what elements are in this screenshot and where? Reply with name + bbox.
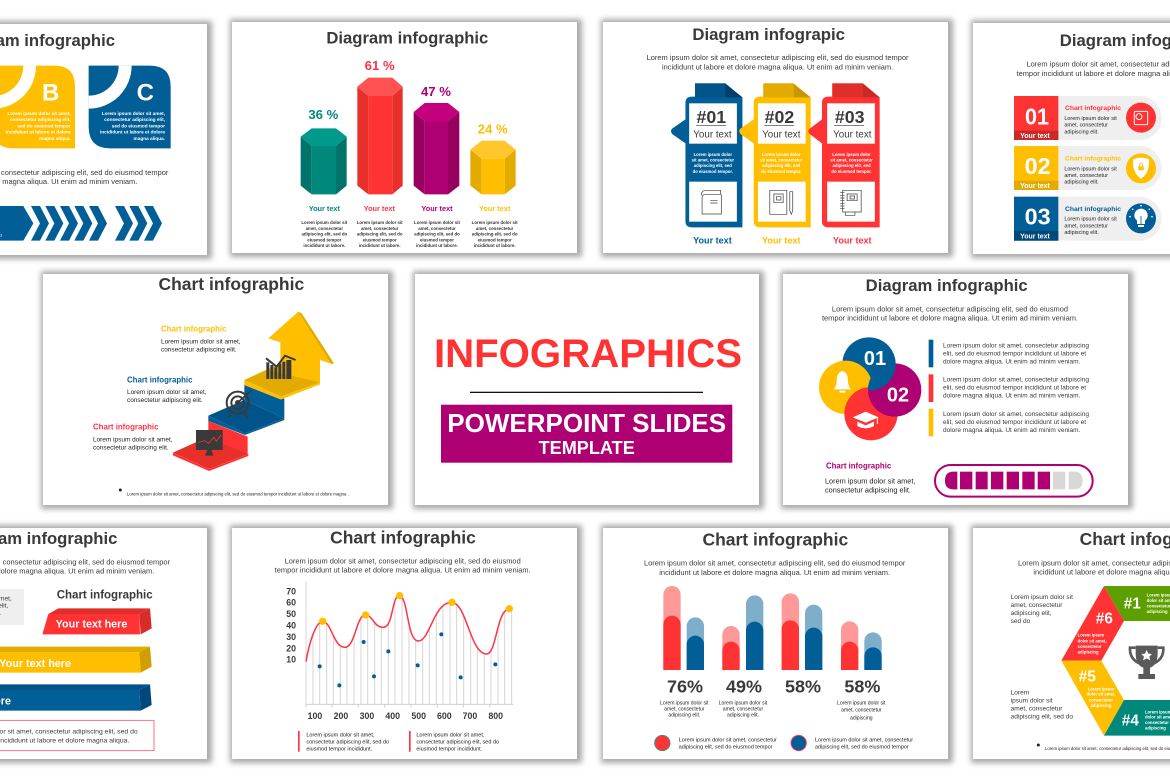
caption: consectetur adipiscing elit. <box>825 486 911 495</box>
prism captions: Your text <box>364 204 395 213</box>
ribbon yellow <box>0 647 152 673</box>
footnote <box>1037 743 1170 751</box>
panel: numbered list slide <box>971 20 1170 258</box>
row 02: Your text <box>1020 183 1051 190</box>
list item 2 <box>929 374 1089 402</box>
tab #02: do eiusmod tempor. <box>761 169 801 174</box>
list item 1: elit, sed do eiusmod tempor incididunt ut labore et <box>943 350 1086 357</box>
prism captions: amet, consectetur <box>361 226 399 231</box>
panel: circles slide <box>781 271 1133 509</box>
callout: blue: Chart infographic <box>127 375 193 384</box>
callout: yellow <box>161 325 241 354</box>
icon: trophy <box>1130 646 1163 679</box>
bar group 49%: 49% <box>726 677 762 697</box>
row 03: amet, consectetur <box>1064 223 1108 229</box>
legend note 1 <box>298 731 389 752</box>
line chart: 60 <box>286 598 296 608</box>
heading: Diagram infographic <box>326 28 488 47</box>
row 01: 01 <box>1025 103 1049 129</box>
segment #5: consectetur <box>1089 698 1113 703</box>
tab #01: adipiscing elit, sed <box>694 163 732 168</box>
list item 2: dolore magna aliqua. Ut enim ad minim veniam. <box>943 393 1081 400</box>
side note bottom: amet, consectetur <box>1011 705 1063 712</box>
row 02 <box>1014 146 1162 190</box>
callout: blue <box>127 375 207 404</box>
prism captions: amet, consectetur <box>476 226 514 231</box>
line chart: 50 <box>286 609 296 619</box>
tab B: magna aliqua. <box>39 136 71 142</box>
tab #03: Your text <box>833 235 872 245</box>
tab C: magna aliqua. <box>134 136 165 142</box>
line chart: 200 <box>334 711 348 721</box>
prism captions: eiusmod tempor <box>420 237 454 242</box>
tab B: B <box>42 79 59 106</box>
panel: 3D ribbons slide <box>0 525 212 763</box>
line chart: 10 <box>286 654 296 664</box>
row 01: amet, consectetur <box>1064 123 1108 129</box>
legend blue <box>791 735 913 751</box>
body text: Lorem ipsum dolor sit amet, consectetur adipiscing elit, sed do eiusmod tempor <box>647 53 909 62</box>
prism captions: eiusmod tempor <box>363 237 397 242</box>
segment #6: #6 <box>1096 611 1113 628</box>
segment #5: #5 <box>1079 669 1096 686</box>
body text: incididunt ut labore et dolore magna aliqua. Ut enim ad minim veniam. <box>659 568 890 577</box>
segment #4: adipiscing <box>1145 726 1166 731</box>
line chart: 100 <box>308 711 322 721</box>
outlined note: incididunt ut labore et dolore magna aliqua. <box>0 738 129 745</box>
prism captions: Your text <box>421 204 453 213</box>
row 02: Lorem ipsum dolor sit <box>1064 166 1117 172</box>
heading: Diagram infograpic <box>692 25 845 44</box>
segment #4: consectetur <box>1145 720 1169 725</box>
line chart: 30 <box>286 632 296 642</box>
row 01: Your text <box>1020 133 1051 140</box>
body text: tempor incididunt ut labore et dolore magna aliqua. Ut enim ad minim veniam. <box>275 566 531 575</box>
tab #02: Your text <box>762 129 801 140</box>
bar group 49% <box>719 595 768 719</box>
body text: Lorem ipsum dolor sit amet, consectetur adipiscing elit, sed do eiusmod tempor <box>644 559 906 568</box>
body text: Lorem ipsum dolor sit amet, consectetur adipiscing elit, sed do eiusmod <box>832 304 1068 313</box>
tab #03: Lorem ipsum dolor <box>832 152 871 157</box>
prism captions: incididunt ut labore. <box>416 243 458 248</box>
legend note 2: Lorem ipsum dolor sit amet, <box>416 733 485 739</box>
caption: Lorem ipsum dolor sit amet, <box>825 477 915 486</box>
callout: red: consectetur adipiscing elit. <box>93 445 169 452</box>
legend red: Lorem ipsum dolor sit amet, consectetur <box>679 738 777 744</box>
panel: hexagon cycle slide <box>971 525 1170 763</box>
caption <box>825 462 915 495</box>
divider rule <box>470 392 703 393</box>
row 01: Lorem ipsum dolor sit <box>1064 116 1117 122</box>
callout: blue: Lorem ipsum dolor sit amet, <box>127 389 207 396</box>
segment #6: adipiscing <box>1078 649 1099 654</box>
tab B: Lorem ipsum dolor sit amet, <box>7 111 71 117</box>
ribbon blue <box>0 684 152 711</box>
segment #5: adipiscing <box>1091 703 1112 708</box>
prism captions: Lorem ipsum dolor sit <box>414 220 461 225</box>
bar group 49%: amet, consectetur <box>723 706 763 712</box>
line chart: 600 <box>437 711 452 721</box>
side note top: Lorem ipsum dolor sit <box>1011 594 1073 601</box>
segment #1: adipiscing <box>1147 609 1168 614</box>
legend note 1: eiusmod tempor incididunt. <box>306 746 373 752</box>
line chart: 70 <box>286 586 296 596</box>
progress bar <box>935 465 1093 497</box>
legend red <box>655 735 777 751</box>
prism captions: incididunt ut labore. <box>303 243 345 248</box>
line chart <box>286 582 513 721</box>
side note bottom: Lorem <box>1011 689 1029 696</box>
prism 47%: 47 % <box>421 84 451 99</box>
list item 1 <box>929 340 1089 367</box>
row 03 <box>1014 197 1162 241</box>
line chart: 20 <box>286 643 296 653</box>
legend note 1: consectetur adipiscing elit, sed do <box>306 739 389 745</box>
legend note 1: Lorem ipsum dolor sit amet, <box>306 733 375 739</box>
callout: yellow: Lorem ipsum dolor sit amet, <box>161 339 241 346</box>
bar group 76%: adipiscing elit. <box>668 713 700 719</box>
segment #1 <box>1104 586 1170 621</box>
panel: cover slide <box>413 271 764 509</box>
grey note box <box>0 589 24 625</box>
stair arrow <box>173 312 334 471</box>
tab C <box>89 66 171 148</box>
tab #01: #01 <box>697 107 726 127</box>
cover title: INFOGRAPHICS <box>434 331 742 376</box>
side note top: amet, consectetur <box>1011 602 1063 609</box>
subheading: Chart infographic <box>57 589 153 601</box>
tab #01: sit amet, consectetur <box>692 157 734 162</box>
legend note 2 <box>409 731 499 752</box>
bar group 58% <box>782 593 822 697</box>
prism 47% <box>414 84 459 194</box>
row 02: 02 <box>1025 153 1051 179</box>
callout: yellow: consectetur adipiscing elit. <box>161 347 237 354</box>
side note top: sed do <box>1011 618 1031 625</box>
icon: monitor <box>196 430 223 456</box>
bar group second 58%: Lorem ipsum dolor sit <box>837 701 886 707</box>
line chart: 40 <box>286 620 296 630</box>
callout: red: Chart infographic <box>93 423 159 432</box>
row 03: Lorem ipsum dolor sit <box>1064 217 1117 223</box>
list item 1: Lorem ipsum dolor sit amet, consectetur adipiscing <box>943 342 1089 349</box>
row 03: adipiscing elit. <box>1064 230 1099 236</box>
side note bottom: adipiscing elit, sed do <box>1011 714 1073 721</box>
bar group second 58%: amet, consectetur <box>841 708 882 714</box>
prism captions: amet, consectetur <box>418 226 456 231</box>
heading: Chart infographic <box>330 527 476 547</box>
bar group second 58%: adipiscing <box>850 715 873 721</box>
prism 61%: 61 % <box>365 58 395 73</box>
heading: Chart infographic <box>702 530 848 550</box>
overlapping circles <box>819 337 921 440</box>
tab #02: adipiscing elit, sed <box>762 163 801 168</box>
prism 36% <box>301 107 347 194</box>
row 01 <box>1014 96 1162 140</box>
ribbon red <box>42 608 152 634</box>
legend blue: adipiscing elit, sed do eiusmod tempor <box>815 744 909 750</box>
prism captions: adipiscing elit, sed do <box>357 232 403 237</box>
prism captions: eiusmod tempor <box>307 237 342 242</box>
heading: Diagram infographic <box>866 276 1028 295</box>
legend blue: Lorem ipsum dolor sit amet, consectetur <box>815 738 913 744</box>
tab C: incididunt ut labore et dolore <box>100 130 165 136</box>
legend note 2: eiusmod tempor incididunt. <box>416 746 483 752</box>
tab #01: Lorem ipsum dolor <box>694 152 732 157</box>
prism captions: adipiscing elit, sed do <box>414 232 460 237</box>
prism captions: Lorem ipsum dolor sit <box>301 220 348 225</box>
prism captions: adipiscing elit, sed do <box>301 232 348 237</box>
bar group second 58% <box>837 621 886 721</box>
tab #01 <box>671 83 742 245</box>
segment #1: #1 <box>1124 595 1141 612</box>
panel: ABC tabs slide <box>0 21 212 259</box>
tab #03: adipiscing elit, sed <box>833 163 871 168</box>
tab C: C <box>137 79 154 106</box>
prism captions: Your text <box>309 204 340 213</box>
line chart: 500 <box>411 711 426 721</box>
tab #03: sit amet, consectetur <box>830 157 873 162</box>
body text: tempor incididunt ut labore et dolore magna aliqua. Ut enim ad minim veniam. <box>822 313 1078 322</box>
callout: yellow: Chart infographic <box>161 325 227 334</box>
prism captions: eiusmod tempor <box>478 237 512 242</box>
segment #5 <box>1061 661 1124 736</box>
tab C: sed do eiusmod tempor <box>112 123 165 129</box>
list item 3: dolore magna aliqua. Ut enim ad minim veniam. <box>943 427 1081 434</box>
prism captions: incididunt ut labore. <box>359 243 401 248</box>
chevron arrows <box>0 206 162 241</box>
row 02: Chart infographic <box>1065 156 1121 163</box>
bar group 76% <box>660 586 709 719</box>
banner <box>441 405 732 463</box>
row 01: Chart infographic <box>1065 105 1121 112</box>
segment #5: Lorem ipsum <box>1088 686 1114 691</box>
heading: Chart infographic <box>158 274 304 294</box>
outlined note <box>0 720 154 751</box>
tab B: sed do eiusmod tempor <box>17 123 71 129</box>
row 03: 03 <box>1025 203 1051 229</box>
list item 3: Lorem ipsum dolor sit amet, consectetur adipiscing <box>943 411 1089 418</box>
icon: target <box>227 390 252 418</box>
list item 2: elit, sed do eiusmod tempor incididunt ut labore et <box>943 385 1086 392</box>
prism captions: Lorem ipsum dolor sit <box>357 220 403 225</box>
ribbon yellow: Your text here <box>0 658 71 670</box>
prism captions: Lorem ipsum dolor sit <box>472 220 518 225</box>
prism captions: amet, consectetur <box>306 226 343 231</box>
bar group 49%: Lorem ipsum dolor sit <box>719 700 768 706</box>
caption: Chart infographic <box>826 462 892 471</box>
tab #01: Your text <box>693 129 732 140</box>
tab #03: Your text <box>833 129 872 140</box>
prism captions <box>301 204 518 248</box>
row 01: adipiscing elit. <box>1064 129 1099 135</box>
prism 61% <box>357 58 403 194</box>
legend note 2: consectetur adipiscing elit, sed do <box>416 739 499 745</box>
line chart: 800 <box>488 711 503 721</box>
side note top: adipiscing elit, <box>1011 610 1052 617</box>
banner: TEMPLATE <box>539 438 635 458</box>
prism captions: adipiscing elit, sed do <box>472 232 518 237</box>
tab B: consectetur adipiscing elit, <box>10 117 71 123</box>
tab #02 <box>739 83 811 245</box>
tab B: incididunt ut labore et dolore <box>6 130 71 136</box>
prism 24% <box>470 122 516 194</box>
bar group 76%: 76% <box>667 677 703 697</box>
segment #6: dolor sit amet, <box>1078 638 1107 643</box>
bar group second 58%: 58% <box>844 677 880 697</box>
panel: staircase arrow slide <box>41 271 393 509</box>
prism captions: Your text <box>479 204 511 213</box>
tab #02: Your text <box>762 235 801 245</box>
tab B <box>0 66 75 148</box>
panel: hexagonal prisms slide <box>230 19 582 257</box>
icon: bar chart <box>266 356 296 379</box>
line chart: 400 <box>385 711 400 721</box>
bar group 76%: Lorem ipsum dolor sit <box>660 700 709 706</box>
row 02: adipiscing elit. <box>1064 180 1099 186</box>
segment #4 <box>1104 700 1170 736</box>
segment #6: consectetur <box>1078 644 1102 649</box>
side note bottom: ipsum dolor sit <box>1011 697 1053 704</box>
prism 24%: 24 % <box>478 122 508 137</box>
tab #01: Your text <box>693 235 732 245</box>
segment #5: dolor sit amet, <box>1087 692 1115 697</box>
body text: incididunt ut labore et dolore magna aliqua. Ut enim ad minim veniam. <box>662 63 893 72</box>
panel: capsule bars slide <box>601 525 953 763</box>
list item 2: Lorem ipsum dolor sit amet, consectetur adipiscing <box>943 377 1089 384</box>
prism 36%: 36 % <box>308 107 339 122</box>
tab #03 <box>808 83 880 245</box>
panel: spline chart slide <box>230 525 582 763</box>
line chart: 700 <box>463 711 477 721</box>
row 03: Your text <box>1020 233 1051 240</box>
prism captions: incididunt ut labore. <box>474 243 516 248</box>
tab #02: #02 <box>765 107 794 127</box>
list item 1: dolore magna aliqua. Ut enim ad minim veniam. <box>943 358 1081 365</box>
segment #1: consectetur <box>1147 603 1170 608</box>
tab C: consectetur adipiscing elit, <box>104 117 165 123</box>
callout: blue: consectetur adipiscing elit. <box>127 397 203 404</box>
overlapping circles: 01 <box>864 348 886 370</box>
bar group 76%: amet, consectetur <box>664 706 705 712</box>
tab #03: #03 <box>835 107 865 127</box>
tab #02: Lorem ipsum dolor <box>762 152 801 157</box>
banner: POWERPOINT SLIDES <box>447 408 726 438</box>
bar group 58%: 58% <box>785 677 821 697</box>
tab #02: sit amet, consectetur <box>760 157 803 162</box>
tab #03: do eiusmod tempor. <box>831 169 872 174</box>
ribbon red: Your text here <box>56 619 127 631</box>
legend red: adipiscing elit, sed do eiusmod tempor <box>679 744 773 750</box>
panel: bookmark tabs slide <box>601 19 953 257</box>
tab C: Lorem ipsum dolor sit amet, <box>102 111 165 117</box>
segment #4: #4 <box>1122 713 1139 730</box>
footnote: Lorem ipsum dolor sit amet, consectetur adipiscing elit, sed do eiusmod tempor incididunt ut labore et dolore magna . <box>127 492 349 497</box>
tab #01: do eiusmod tempor. <box>693 169 733 174</box>
list item 3 <box>929 409 1089 436</box>
callout: red <box>93 423 173 452</box>
row 02: amet, consectetur <box>1064 173 1108 179</box>
line chart: 300 <box>360 711 374 721</box>
segment #6 <box>1061 586 1124 661</box>
body text: Lorem ipsum dolor sit amet, consectetur adipiscing elit, sed do eiusmod <box>285 557 521 566</box>
overlapping circles: 02 <box>887 385 909 407</box>
callout: red: Lorem ipsum dolor sit amet, <box>93 436 173 443</box>
bar group 49%: adipiscing elit. <box>727 713 759 719</box>
row 03: Chart infographic <box>1065 206 1121 213</box>
segment #6: Lorem ipsum <box>1078 633 1104 638</box>
list item 3: elit, sed do eiusmod tempor incididunt ut labore et <box>943 419 1086 426</box>
